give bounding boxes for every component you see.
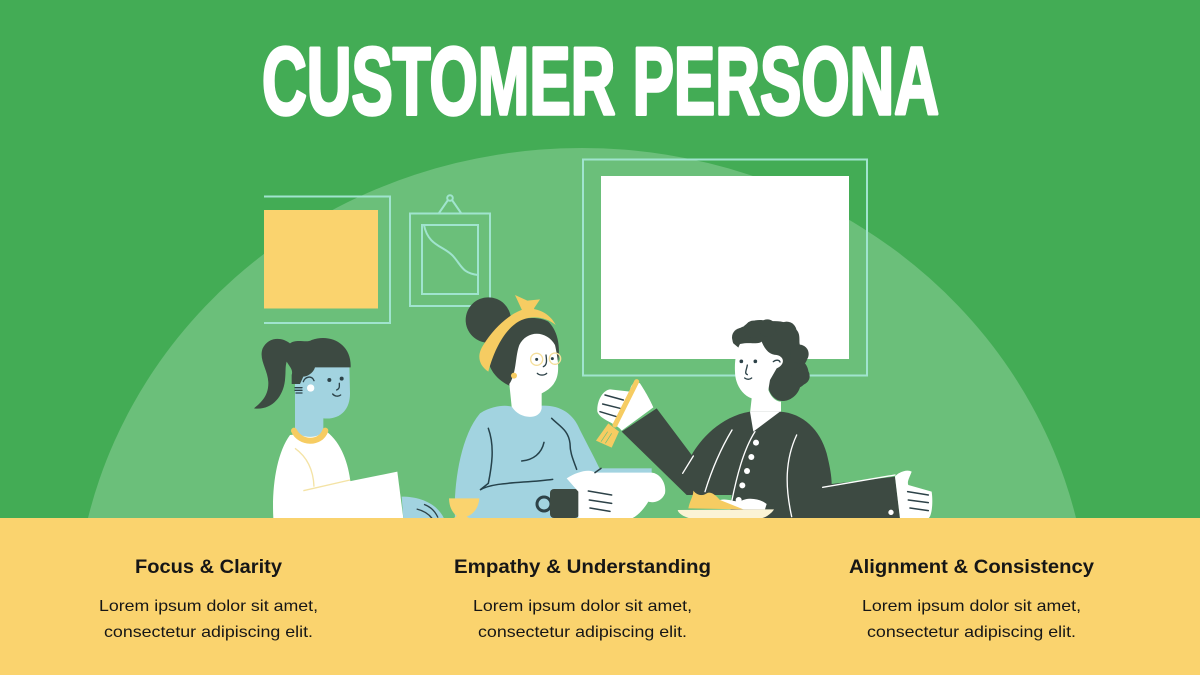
yellow framed square (264, 196, 390, 323)
mug (537, 489, 579, 518)
person: woman with headband (449, 295, 602, 518)
earring and facial features (295, 377, 343, 396)
person: woman with curly hair (596, 319, 932, 518)
yellow cup (449, 498, 479, 518)
ear (511, 373, 517, 379)
sweater (455, 406, 602, 518)
face and neck (735, 342, 783, 413)
bowl rim (595, 468, 652, 477)
food (688, 491, 767, 509)
facial features (740, 360, 780, 379)
paper sheet (303, 472, 403, 518)
column: alignment and consistency: consectetur adipiscing elit. (867, 624, 1076, 641)
hair bun (466, 297, 511, 343)
fork (596, 382, 637, 448)
glasses and facial features (531, 353, 561, 375)
background dome (88, 148, 1076, 518)
jacket buttons (736, 440, 894, 515)
ponytail and hair (254, 338, 351, 409)
headband with bow (479, 295, 556, 372)
column: alignment and consistency (849, 557, 1094, 641)
hanging picture (410, 195, 490, 306)
white blouse (273, 432, 373, 518)
column: alignment and consistency: Alignment & Consistency (849, 557, 1094, 578)
column: focus and clarity: consectetur adipiscing elit. (104, 624, 313, 641)
face and neck (509, 334, 558, 417)
column: focus and clarity: Lorem ipsum dolor sit amet, (99, 598, 318, 615)
yellow footer band (0, 518, 1200, 675)
column: alignment and consistency: Lorem ipsum dolor sit amet, (862, 598, 1081, 615)
column: empathy and understanding: consectetur adipiscing elit. (478, 624, 687, 641)
column: empathy and understanding: Lorem ipsum dolor sit amet, (473, 598, 692, 615)
sweater fold lines (480, 418, 577, 490)
raised hand (597, 382, 653, 431)
wall decor (264, 160, 867, 376)
plate (678, 509, 774, 518)
collar (750, 412, 780, 432)
column: empathy and understanding: Empathy & Understanding (454, 557, 711, 578)
column: focus and clarity (99, 557, 318, 641)
jacket seams (683, 430, 895, 517)
finger lines (588, 468, 612, 511)
blouse strap (295, 448, 314, 487)
column: empathy and understanding (454, 557, 711, 641)
bowl and hand (567, 468, 665, 518)
resting hand (402, 497, 444, 518)
neck and face (295, 363, 350, 437)
extended hand (895, 471, 932, 518)
large white framed panel (583, 160, 867, 376)
column: focus and clarity: Focus & Clarity (135, 557, 282, 578)
jacket (622, 408, 900, 518)
curly hair (732, 319, 810, 401)
necklace (294, 431, 325, 441)
person: woman with ponytail (254, 338, 444, 518)
hair (488, 318, 559, 386)
